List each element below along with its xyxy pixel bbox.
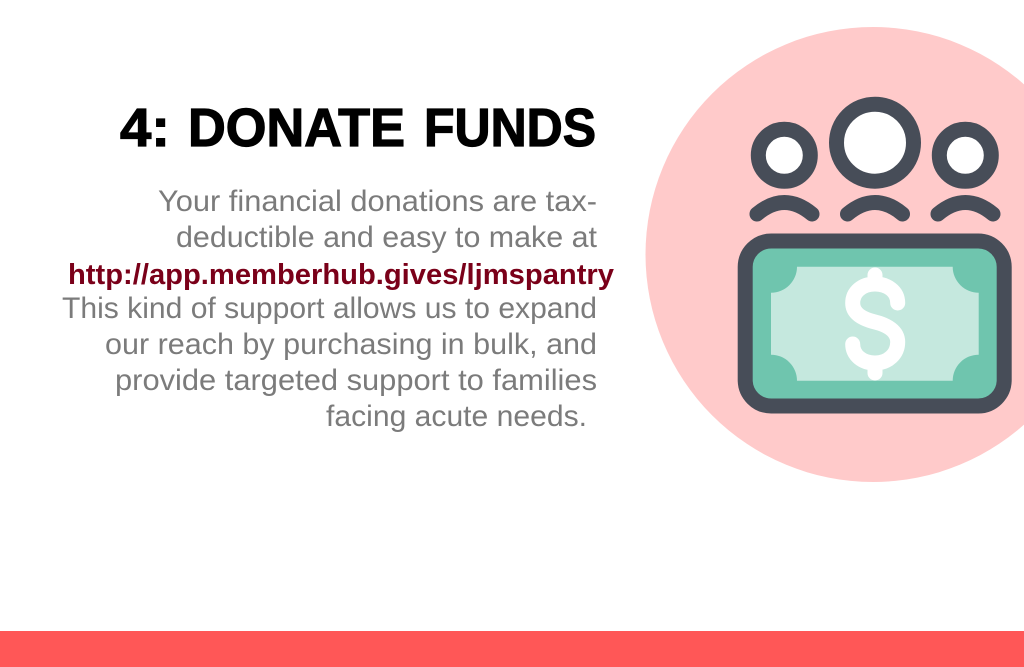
icon: three people and dollar bill [745,104,1004,406]
body text: facing acute needs. [326,400,587,433]
body text [62,185,598,433]
body text: provide targeted support to families [115,364,597,397]
title: 4: [120,98,170,158]
body text: deductible and easy to make at [176,221,598,254]
bottom bar [0,631,1024,667]
icon: centre person [836,104,914,214]
body text: Your financial donations are tax- [158,185,597,218]
icon: dollar bill [745,241,1004,406]
icon: right person [938,129,993,214]
title: FUNDS [424,98,596,158]
donation link: http://app.memberhub.gives/ljmspantry [68,259,614,291]
title: DONATE [188,98,405,158]
body text: This kind of support allows us to expand [62,292,597,325]
title [120,98,596,158]
body text: our reach by purchasing in bulk, and [105,328,597,361]
background circle [646,27,1024,482]
icon: left person [757,129,812,214]
